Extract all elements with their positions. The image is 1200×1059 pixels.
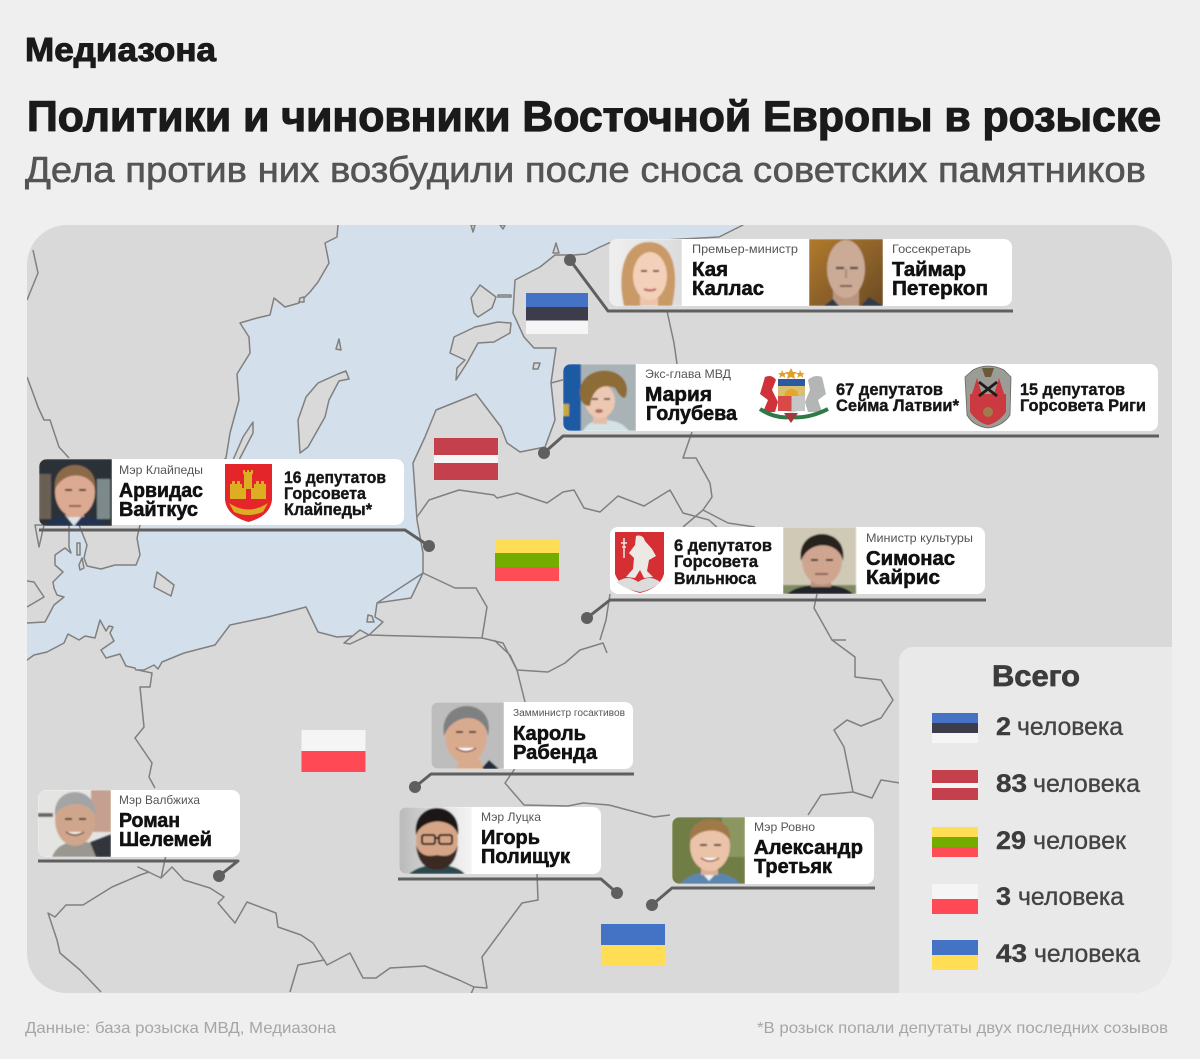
legend row: Latvia: [932, 770, 1140, 800]
legend row: Ukraine: 43: [996, 940, 1027, 968]
legend row: Estonia: 2: [996, 713, 1011, 741]
source note: Данные: база розыска МВД, Медиазона: [25, 1020, 336, 1037]
logo: Mediazona: Медиазона: [25, 31, 217, 68]
text: Roman Szelemej: Шелемей: [119, 829, 212, 851]
text: Riga council deputies: [1020, 381, 1146, 415]
legend row: Poland: человека: [1018, 883, 1124, 911]
card: Estonia officials: [564, 239, 1013, 311]
text: Igor Polishchuk: [481, 810, 571, 868]
subtitle: Дела против них возбудили после сноса советских памятников: [25, 149, 1146, 190]
country borders: [27, 250, 900, 994]
card: Karol Rabenda: [409, 702, 634, 793]
legend row: Estonia: человека: [1017, 713, 1123, 741]
text: Simonas Kairis: Министр культуры: [866, 531, 973, 545]
legend row: Estonia: [932, 713, 1123, 743]
text: Maria Golubeva: Мария: [645, 384, 712, 406]
legend row: Lithuania: человек: [1033, 827, 1127, 855]
text: Oleksandr Tretyak: [754, 820, 863, 878]
text: Vilnius council deputies: [674, 537, 772, 588]
text: Arvidas Vaitkus: Вайткус: [119, 499, 198, 521]
text: Simonas Kairis: Симонас: [866, 548, 955, 570]
text: Roman Szelemej: Роман: [119, 810, 180, 832]
text: Roman Szelemej: Мэр Валбжиха: [119, 793, 200, 807]
photo: Taimar Peterkop: [809, 239, 883, 306]
leader line: Latvia: [538, 436, 1159, 459]
leader line: Rabenda: [409, 774, 634, 793]
leader line: Tretyak: [646, 888, 875, 911]
islands: [35, 225, 559, 644]
flag: Latvia: [434, 438, 498, 480]
photo: Oleksandr Tretyak: [672, 817, 745, 884]
text: Karol Rabenda: Замминистр госактивов: [513, 708, 625, 719]
text: Taimar Peterkop: Госсекретарь: [892, 242, 971, 256]
text: Oleksandr Tretyak: Александр: [754, 837, 863, 859]
text: Riga council deputies: 15 депутатов: [1020, 381, 1125, 399]
text: Klaipeda council deputies: Клайпеды*: [284, 501, 373, 519]
title: Политики и чиновники Восточной Европы в розыске: [27, 93, 1161, 141]
flag: Lithuania: [495, 539, 559, 581]
text: Kaja Kallas: Премьер-министр: [692, 242, 798, 256]
card: Igor Polishchuk: [398, 807, 623, 899]
legend row: Lithuania: 29: [996, 827, 1026, 855]
flag: Ukraine: [601, 924, 665, 966]
legend heading: Всего: [992, 660, 1080, 693]
text: Igor Polishchuk: Игорь: [481, 827, 540, 849]
card: Latvia officials: [538, 364, 1159, 459]
photo: Kaja Kallas: [609, 239, 682, 306]
text: Maria Golubeva: Голубева: [646, 403, 738, 425]
text: Karol Rabenda: Рабенда: [513, 742, 598, 764]
photo: Simonas Kairis: [783, 527, 856, 594]
text: Vilnius council deputies: Вильнюса: [674, 570, 757, 588]
text: Oleksandr Tretyak: Третьяк: [754, 856, 833, 878]
text: Taimar Peterkop: Петеркоп: [892, 278, 988, 300]
emblem: Latvia coat of arms: [760, 368, 828, 423]
leader line: Szelemej: [38, 861, 238, 882]
emblem: Vilnius coat of arms: [615, 532, 664, 593]
footnote: *В розыск попали депутаты двух последних созывов: [757, 1020, 1168, 1037]
legend row: Latvia: человека: [1033, 770, 1140, 798]
text: Riga council deputies: Горсовета Риги: [1020, 397, 1146, 415]
photo: Maria Golubeva: [563, 364, 636, 431]
text: Saeima deputies: 67 депутатов: [836, 381, 943, 399]
text: Roman Szelemej: [119, 793, 212, 851]
text: Maria Golubeva: [645, 367, 738, 425]
leader line: Estonia: [564, 254, 1013, 311]
legend row: Ukraine: [932, 940, 1140, 970]
card: Oleksandr Tretyak: [646, 817, 875, 911]
photo: Karol Rabenda: [431, 702, 504, 769]
photo: Arvidas Vaitkus: [39, 459, 112, 526]
legend row: Ukraine: человека: [1034, 940, 1140, 968]
flag: Estonia: [526, 293, 588, 334]
emblem: Riga coat of arms: [965, 366, 1011, 428]
text: Kaja Kallas: Каллас: [692, 278, 764, 300]
text: Maria Golubeva: Экс-глава МВД: [645, 367, 731, 381]
text: Igor Polishchuk: Полищук: [481, 846, 571, 868]
emblem: Klaipeda coat of arms: [225, 464, 272, 522]
text: Klaipeda council deputies: Горсовета: [284, 485, 367, 503]
text: Oleksandr Tretyak: Мэр Ровно: [754, 820, 815, 834]
leader line: Polishchuk: [398, 879, 623, 899]
text: Klaipeda council deputies: [284, 469, 386, 519]
text: Karol Rabenda: Кароль: [513, 723, 586, 745]
text: Vilnius council deputies: 6 депутатов: [674, 537, 772, 555]
legend row: Lithuania: [932, 827, 1127, 857]
legend row: Poland: 3: [996, 883, 1011, 911]
leader line: Klaipeda: [39, 530, 435, 552]
text: Vilnius council deputies: Горсовета: [674, 553, 759, 571]
text: Arvidas Vaitkus: [119, 463, 203, 521]
text: Simonas Kairis: [866, 531, 973, 589]
card: Lithuania officials: [581, 527, 986, 624]
leader line: Lithuania: [581, 600, 986, 624]
card: Roman Szelemej: [38, 790, 240, 882]
legend row: Poland: [932, 883, 1124, 914]
text: Karol Rabenda: [513, 708, 625, 764]
map: Baltic region: [20, 215, 1172, 994]
text: Arvidas Vaitkus: Мэр Клайпеды: [119, 463, 203, 477]
text: Klaipeda council deputies: 16 депутатов: [284, 469, 386, 487]
text: Kaja Kallas: Кая: [692, 259, 728, 281]
text: Kaja Kallas: [692, 242, 798, 300]
text: Simonas Kairis: Кайрис: [866, 567, 940, 589]
card: Klaipeda officials: [39, 459, 435, 552]
photo: Roman Szelemej: [38, 790, 111, 857]
text: Taimar Peterkop: Таймар: [892, 259, 966, 281]
text: Saeima deputies: Сейма Латвии*: [836, 397, 960, 415]
text: Igor Polishchuk: Мэр Луцка: [481, 810, 541, 824]
text: Taimar Peterkop: [892, 242, 988, 300]
sea: Baltic: [20, 215, 750, 670]
legend row: Latvia: 83: [996, 770, 1027, 798]
flag: Poland: [302, 730, 366, 772]
text: Saeima deputies: [836, 381, 960, 415]
text: Arvidas Vaitkus: Арвидас: [119, 480, 203, 502]
photo: Igor Polishchuk: [399, 807, 472, 874]
panel: totals legend: [899, 647, 1172, 993]
